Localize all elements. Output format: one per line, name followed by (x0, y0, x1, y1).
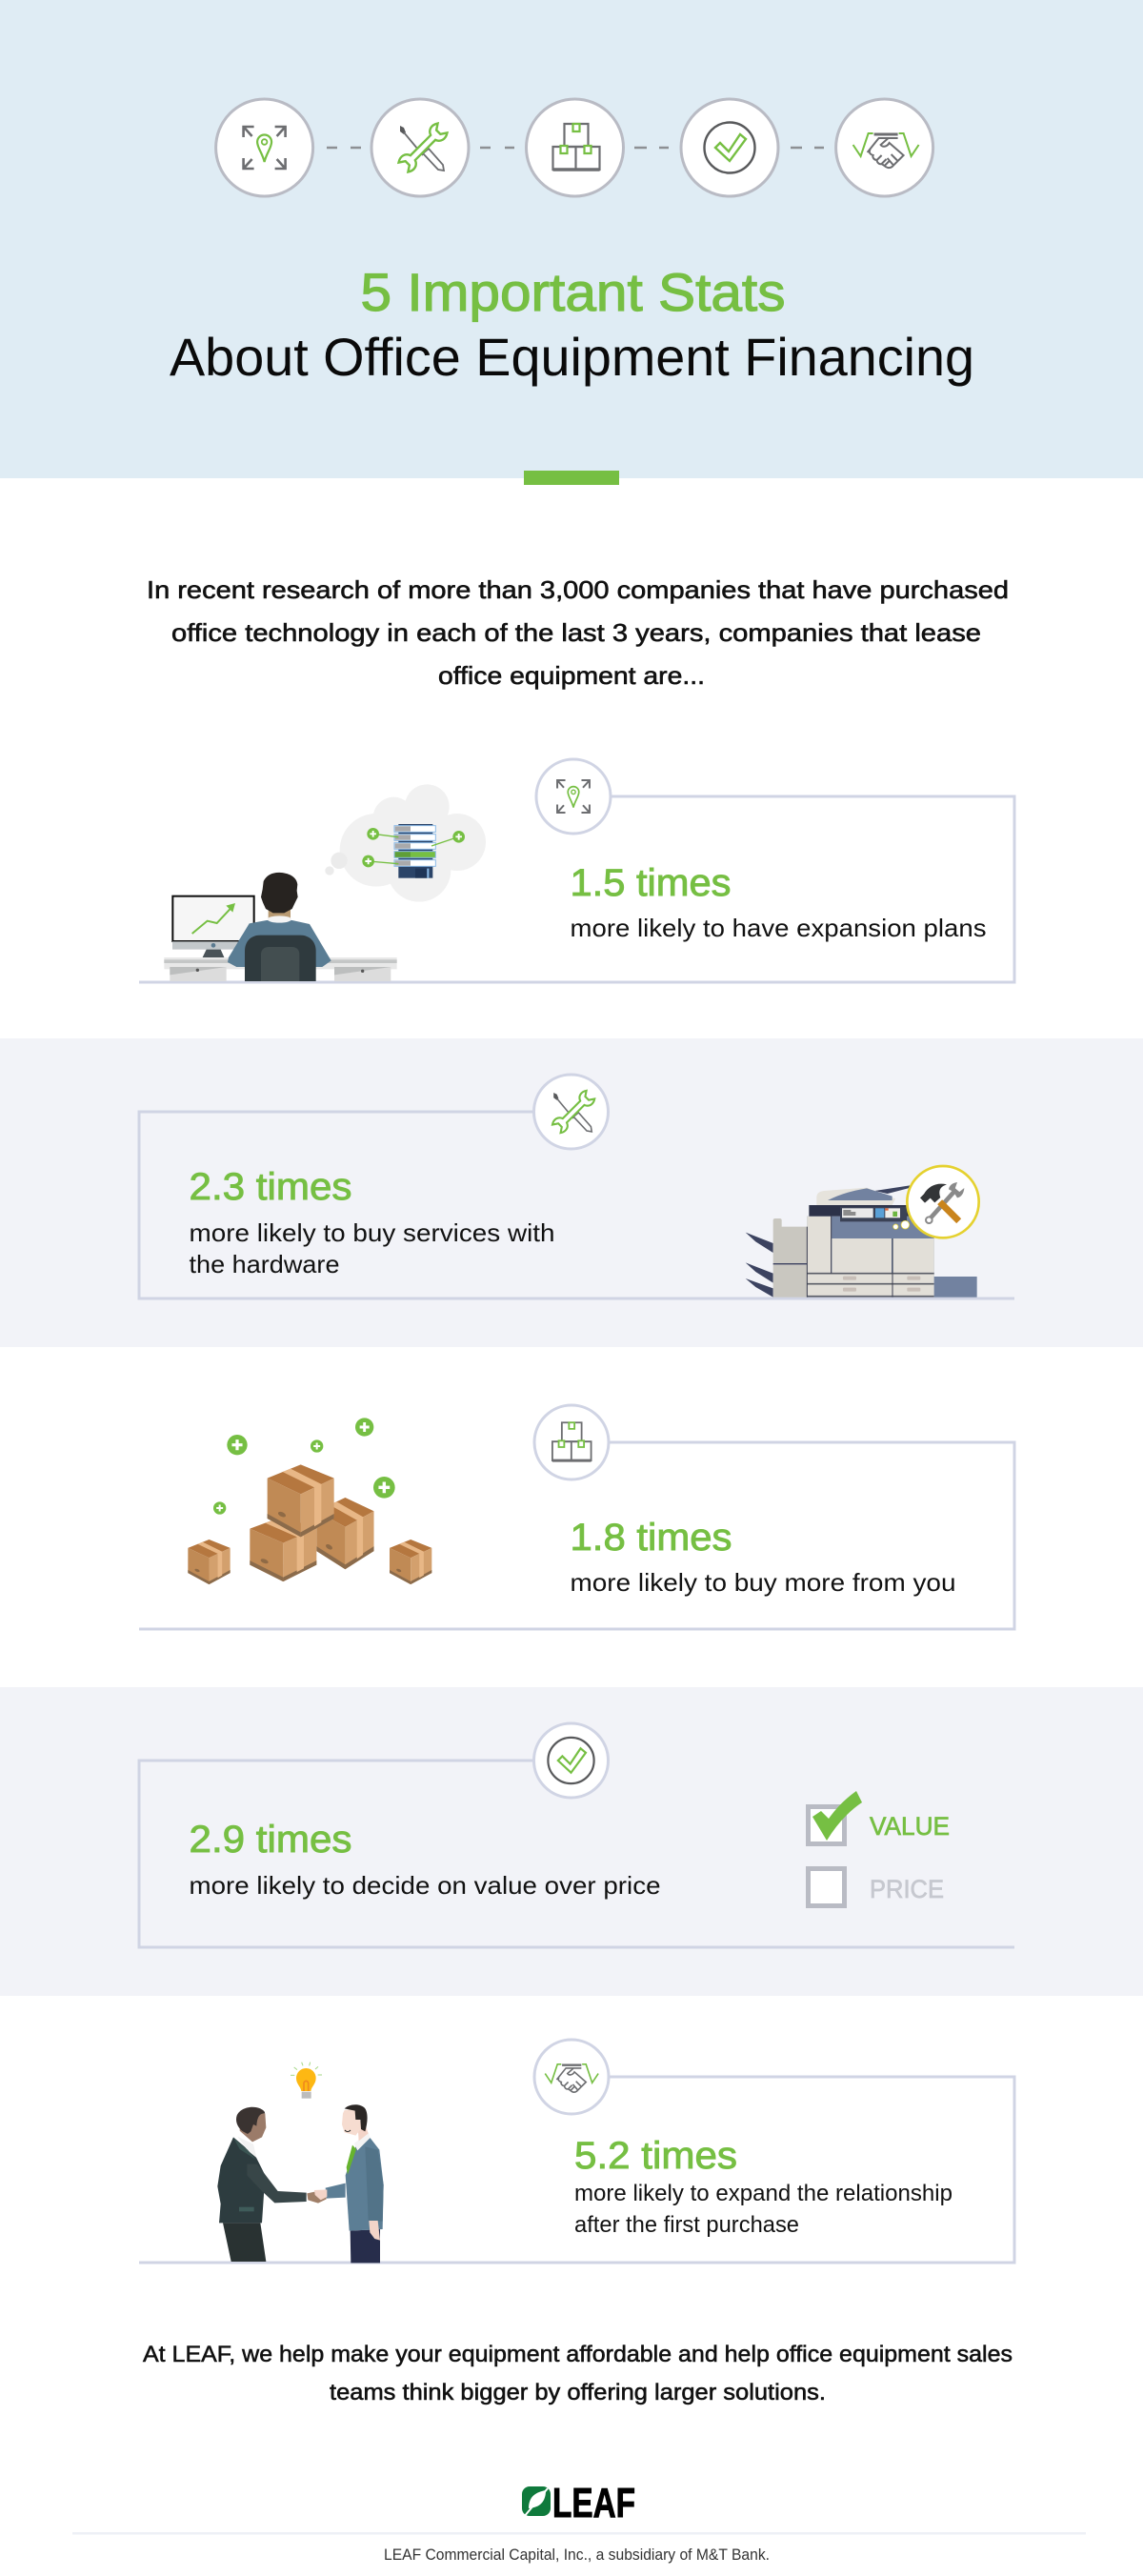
checkbox: price (808, 1869, 944, 1905)
logo: LEAF: LEAF (552, 2480, 635, 2526)
illustration: cardboard boxes (188, 1418, 431, 1584)
footer note: LEAF Commercial Capital, Inc., a subsidiary of M&T Bank. (384, 2546, 770, 2564)
desk (164, 957, 397, 981)
man right (314, 2104, 384, 2263)
title: About Office Equipment Financing (170, 327, 974, 387)
panel icon: tools (533, 1075, 608, 1149)
stat value: 5.2 times (574, 2135, 737, 2177)
man left (217, 2107, 327, 2262)
stat description (189, 1218, 554, 1278)
illustration: two men shaking hands (217, 2063, 384, 2263)
accent bar (524, 471, 619, 485)
panel frame (139, 1442, 1014, 1629)
control panel (809, 1205, 912, 1217)
checkbox: value (808, 1791, 950, 1844)
stat value: 1.8 times (570, 1517, 732, 1559)
panel icon: boxes (534, 1405, 609, 1479)
person (228, 873, 331, 981)
intro text: office technology in each of the last 3 years, companies that lease (171, 618, 981, 647)
tools badge (907, 1166, 979, 1238)
title: 5 Important Stats (360, 262, 785, 322)
light bulb (291, 2063, 322, 2099)
icon: check (681, 99, 778, 196)
stat description (574, 2181, 952, 2238)
connector dashes (327, 147, 824, 149)
stat description: the hardware (189, 1250, 339, 1278)
stat description: more likely to buy more from you (570, 1568, 956, 1597)
checkbox: value: VALUE (870, 1812, 950, 1841)
logo: LEAF (522, 2480, 635, 2526)
stat value: 1.5 times (570, 862, 732, 904)
thought cloud (325, 784, 486, 902)
box stack (250, 1464, 374, 1581)
monitor (172, 896, 254, 958)
panel: stat 5 relationship (139, 2040, 1014, 2263)
growth connectors (362, 828, 465, 867)
closing statement: At LEAF, we help make your equipment affordable and help office equipment sales (143, 2342, 1013, 2367)
stat description: more likely to decide on value over price (189, 1871, 661, 1900)
intro text (147, 575, 1009, 690)
panel frame (139, 2077, 1014, 2263)
intro text: In recent research of more than 3,000 companies that have purchased (147, 575, 1009, 604)
header band (0, 0, 1143, 478)
stat description: more likely to buy services with (189, 1218, 554, 1247)
stat description: more likely to have expansion plans (570, 914, 987, 942)
footer divider (72, 2532, 1086, 2534)
panel icon: handshake (534, 2040, 609, 2114)
small box right (390, 1540, 431, 1584)
title (170, 262, 974, 387)
icon: leaf mark (522, 2486, 551, 2517)
stat description: after the first purchase (574, 2212, 799, 2238)
panel frame (139, 1761, 1014, 1947)
panel frame (139, 1112, 1014, 1298)
panel: stat 4 value over price (139, 1723, 1014, 1947)
copier body (807, 1217, 934, 1298)
side cabinet (934, 1277, 977, 1298)
icon: tools (371, 99, 469, 196)
small box left (188, 1540, 231, 1584)
closing statement: teams think bigger by offering larger solutions. (330, 2380, 826, 2405)
panel: stat 2 background (0, 1038, 1143, 1347)
finisher (773, 1218, 807, 1298)
panel frame (139, 796, 1014, 982)
panel: stat 2 services (139, 1075, 1014, 1298)
panel: stat 4 background (0, 1687, 1143, 1996)
intro text: office equipment are... (438, 661, 705, 690)
building (394, 824, 435, 878)
illustration: copier with tools (746, 1166, 979, 1298)
output trays (746, 1233, 773, 1298)
icon: handshake (836, 99, 933, 196)
panel icon: expansion (536, 759, 611, 834)
checkbox: price: PRICE (870, 1875, 944, 1903)
panel: stat 1 expansion plans (139, 759, 1014, 982)
process icon row (216, 99, 933, 196)
panel: stat 3 buy more (139, 1405, 1014, 1629)
stat description: more likely to expand the relationship (574, 2181, 952, 2206)
plus markers (213, 1418, 395, 1515)
panel icon: check (533, 1723, 608, 1798)
scanner (874, 1184, 916, 1194)
icon: expansion (216, 99, 313, 196)
closing statement (143, 2342, 1013, 2405)
illustration: person at desk thinking (164, 784, 486, 981)
stat value: 2.3 times (189, 1166, 352, 1208)
icon: boxes (526, 99, 623, 196)
stat value: 2.9 times (189, 1819, 352, 1861)
